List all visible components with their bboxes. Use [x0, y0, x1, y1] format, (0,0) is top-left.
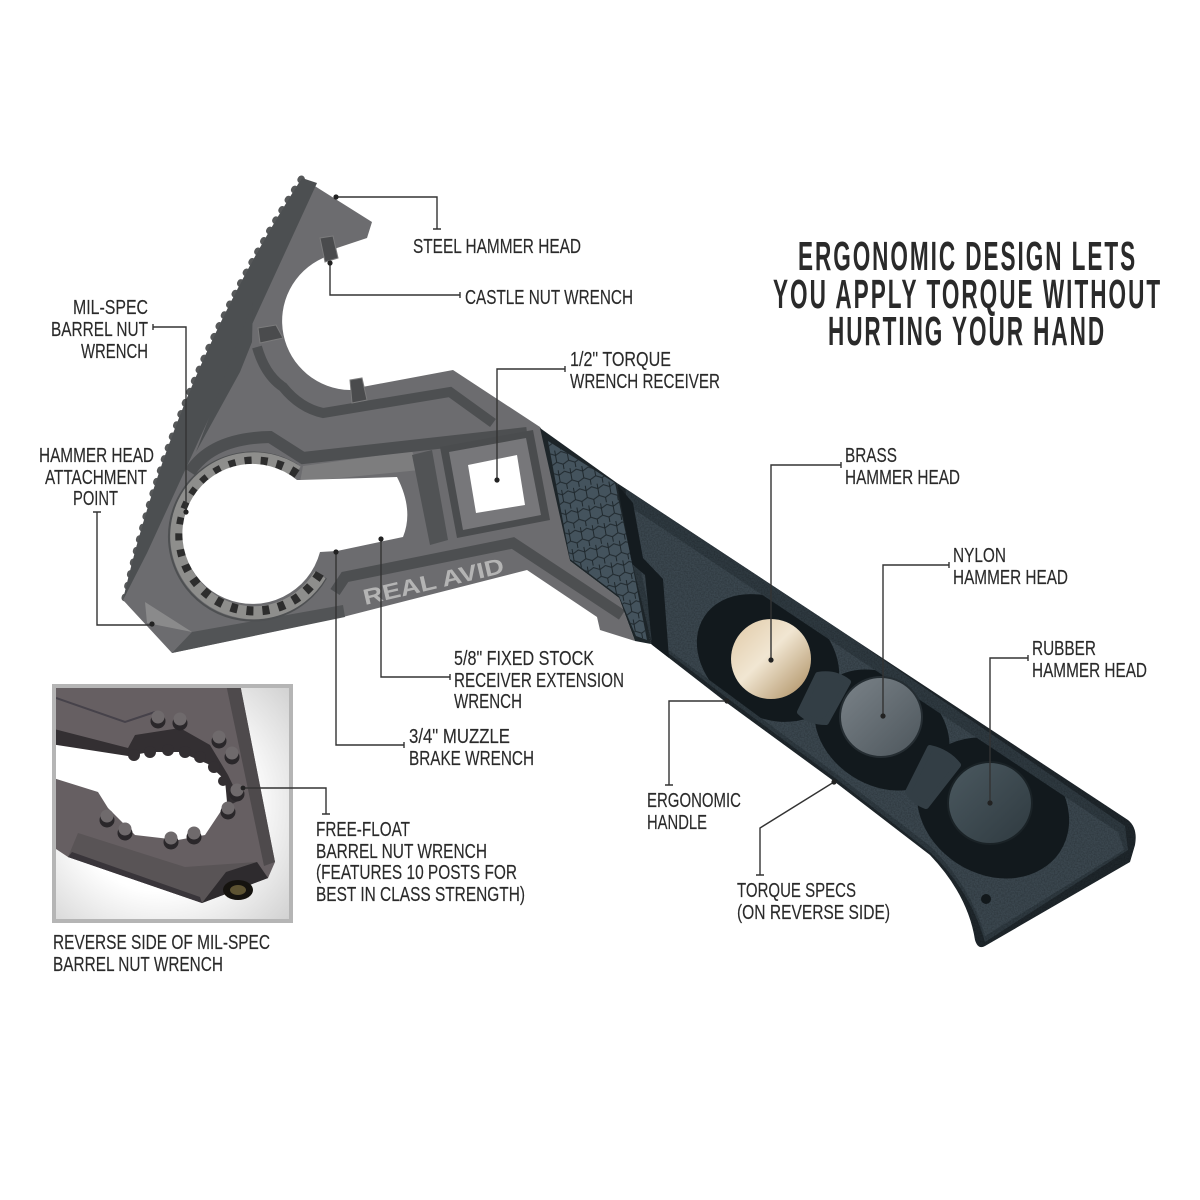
- callout: muzzle brake wrench: [333, 549, 534, 770]
- callout: nylon hammer head: NYLON: [953, 545, 1006, 567]
- callout: fixed stock receiver extension wrench: RECEIVER EXTENSION: [454, 670, 624, 692]
- callout: torque wrench receiver: [494, 349, 720, 483]
- callout: nylon hammer head: HAMMER HEAD: [953, 567, 1068, 589]
- callout: steel hammer head: [333, 194, 581, 258]
- real avid logo: REAL AVID: [361, 553, 506, 610]
- callout: free-float barrel nut wrench: FREE-FLOAT: [316, 819, 410, 841]
- callout: ergonomic handle: [647, 698, 741, 834]
- callout: hammer head attachment point: ATTACHMENT: [45, 467, 147, 489]
- callout: fixed stock receiver extension wrench: 5/8" FIXED STOCK: [454, 648, 595, 670]
- callout: torque specs: TORQUE SPECS: [737, 880, 856, 902]
- callout: castle nut wrench: [327, 260, 633, 309]
- title: ERGONOMIC DESIGN LETS: [798, 234, 1135, 280]
- callout: free-float barrel nut wrench: [241, 786, 525, 906]
- handle body: [610, 480, 1140, 950]
- inner teeth: [128, 752, 226, 786]
- callout: brass hammer head: HAMMER HEAD: [845, 467, 960, 489]
- inset caption: [53, 932, 270, 976]
- callout: ergonomic handle: ERGONOMIC: [647, 790, 741, 812]
- callout: torque wrench receiver: WRENCH RECEIVER: [570, 371, 720, 393]
- callout: hammer head attachment point: HAMMER HEAD: [39, 445, 154, 467]
- callout: mil-spec barrel nut wrench: [51, 297, 189, 515]
- handle grip hex texture: [540, 428, 651, 644]
- callout: rubber hammer head: RUBBER: [1032, 638, 1096, 660]
- icon: rubber hammer head: [948, 762, 1032, 844]
- callout: free-float barrel nut wrench: (FEATURES 10 POSTS FOR: [316, 862, 517, 884]
- torque wrench receiver: [440, 430, 550, 538]
- callout: torque wrench receiver: 1/2" TORQUE: [570, 349, 671, 371]
- barrel nut ring with teeth: [169, 453, 326, 621]
- callout: mil-spec barrel nut wrench: BARREL NUT: [51, 319, 148, 341]
- inset photo: reverse side of barrel nut wrench: [50, 684, 291, 921]
- callout: torque specs: (ON REVERSE SIDE): [737, 902, 890, 924]
- callout: rubber hammer head: HAMMER HEAD: [1032, 660, 1147, 682]
- callout: torque specs: [737, 779, 890, 924]
- callout: fixed stock receiver extension wrench: [378, 536, 624, 713]
- castle nut knobs: [258, 236, 367, 403]
- icon: nylon hammer head: [840, 677, 922, 757]
- hammer head recesses: [696, 594, 1070, 878]
- callout: free-float barrel nut wrench: BARREL NUT WRENCH: [316, 841, 487, 863]
- inset caption: REVERSE SIDE OF MIL-SPEC: [53, 932, 270, 954]
- posts: [100, 710, 244, 850]
- wrench tool illustration: [123, 178, 1140, 950]
- callout: fixed stock receiver extension wrench: WRENCH: [454, 691, 522, 713]
- callout: mil-spec barrel nut wrench: MIL-SPEC: [73, 297, 148, 319]
- callout: steel hammer head: STEEL HAMMER HEAD: [413, 236, 581, 258]
- callout: nylon hammer head: [880, 545, 1068, 719]
- title: HURTING YOUR HAND: [828, 309, 1104, 355]
- icon: brass hammer head: [731, 619, 811, 699]
- callout: free-float barrel nut wrench: BEST IN CLASS STRENGTH): [316, 884, 525, 906]
- callout: rubber hammer head: [987, 638, 1147, 806]
- lighter bands between recesses: [800, 674, 958, 806]
- callout: ergonomic handle: HANDLE: [647, 812, 707, 834]
- barrel nut and stock wrench opening: [182, 464, 407, 604]
- callout: muzzle brake wrench: 3/4" MUZZLE: [409, 726, 510, 748]
- callout: brass hammer head: [768, 445, 960, 663]
- callout: hammer head attachment point: [39, 445, 155, 627]
- callout: hammer head attachment point: POINT: [73, 488, 118, 510]
- title: YOU APPLY TORQUE WITHOUT: [773, 272, 1160, 318]
- handle lanyard hole: [981, 894, 991, 904]
- handle dark stripe: [615, 482, 669, 658]
- callout: brass hammer head: BRASS: [845, 445, 897, 467]
- title: [773, 234, 1160, 355]
- callout: castle nut wrench: CASTLE NUT WRENCH: [465, 287, 633, 309]
- callout: mil-spec barrel nut wrench: WRENCH: [81, 341, 148, 363]
- callout: muzzle brake wrench: BRAKE WRENCH: [409, 748, 534, 770]
- steel wrench head body: [123, 178, 635, 653]
- inset caption: BARREL NUT WRENCH: [53, 954, 223, 976]
